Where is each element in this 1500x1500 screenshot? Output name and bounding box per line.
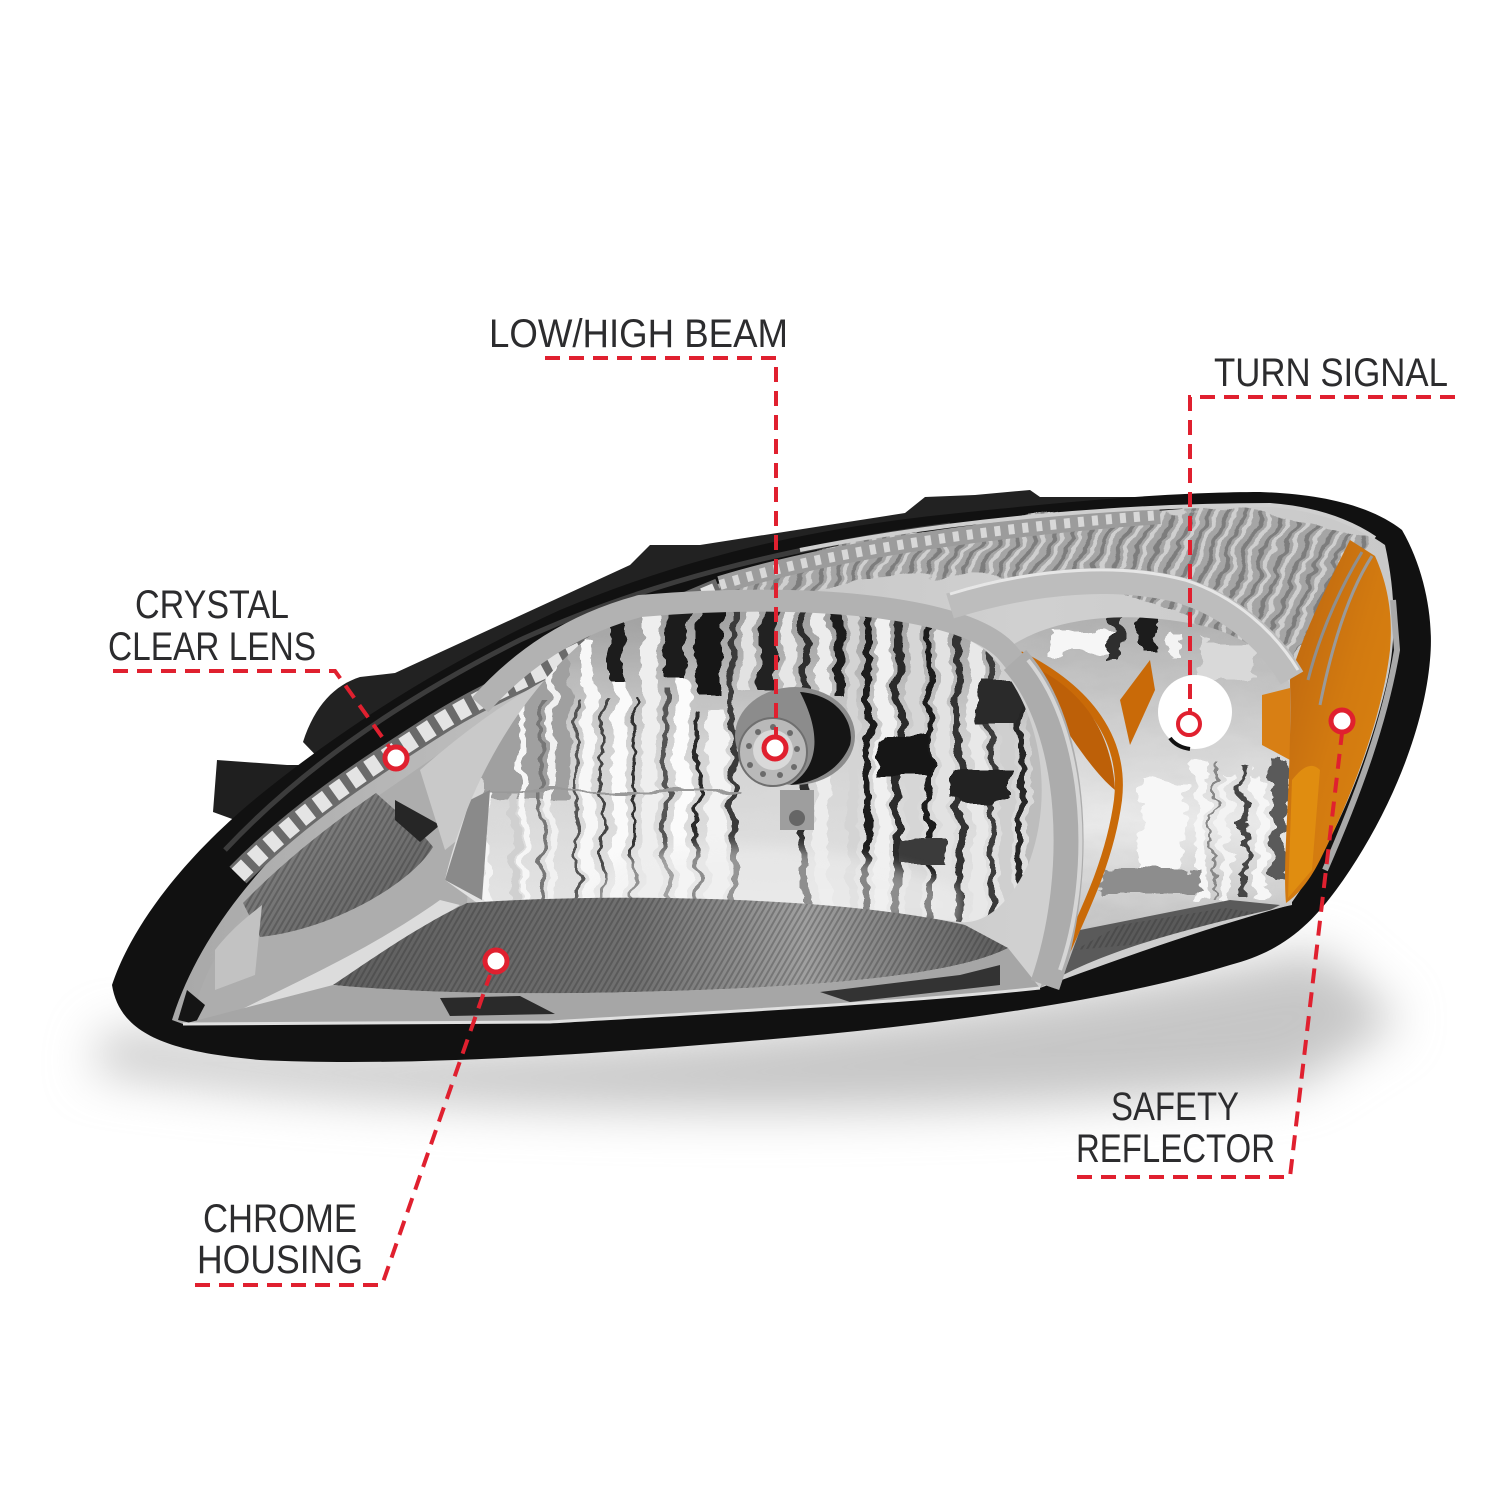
main reflector with vertical facets bbox=[445, 612, 1042, 922]
chrome bezel bbox=[480, 570, 1298, 985]
label line 2: REFLECTOR bbox=[1076, 1127, 1275, 1171]
callout: safety reflector bbox=[1076, 710, 1353, 1177]
housing gloss edge bbox=[225, 525, 950, 850]
label line 2: CLEAR LENS bbox=[108, 625, 316, 669]
mounting bracket: upper clips bbox=[303, 490, 1200, 770]
ground shadow bbox=[90, 950, 1400, 1110]
label: CRYSTAL bbox=[135, 583, 289, 627]
left wedge reflector bbox=[178, 680, 545, 1024]
turn signal bulb opening bbox=[1158, 675, 1232, 749]
marker bbox=[385, 747, 407, 769]
headlight assembly bbox=[112, 490, 1431, 1062]
label: CHROME bbox=[203, 1197, 357, 1241]
leader line bbox=[195, 975, 490, 1285]
lower dark textured band bbox=[183, 898, 1040, 1024]
low/high beam bulb bbox=[735, 687, 855, 830]
label: SAFETY bbox=[1111, 1085, 1239, 1129]
marker bbox=[1331, 710, 1353, 732]
leader line bbox=[545, 358, 776, 735]
label: LOW/HIGH BEAM bbox=[489, 312, 788, 356]
marker bbox=[764, 737, 786, 759]
callout: crystal clear lens bbox=[108, 583, 407, 769]
mounting bracket: left tab bbox=[213, 760, 340, 820]
leader line bbox=[113, 671, 390, 748]
black outer housing bbox=[112, 492, 1431, 1062]
clear lens interior bbox=[172, 505, 1394, 1024]
callout: chrome housing bbox=[195, 950, 507, 1285]
callout: low/high beam bbox=[489, 312, 788, 759]
leader line bbox=[1077, 733, 1342, 1177]
right reflector chamber bbox=[1014, 617, 1292, 988]
label line 2: HOUSING bbox=[197, 1238, 363, 1282]
marker bbox=[1178, 713, 1200, 735]
callout: turn signal bbox=[1178, 351, 1455, 735]
amber side marker bbox=[1262, 540, 1397, 903]
serrated lens band bbox=[238, 505, 1375, 875]
label: TURN SIGNAL bbox=[1214, 351, 1448, 395]
leader line bbox=[1190, 397, 1455, 712]
marker bbox=[485, 950, 507, 972]
